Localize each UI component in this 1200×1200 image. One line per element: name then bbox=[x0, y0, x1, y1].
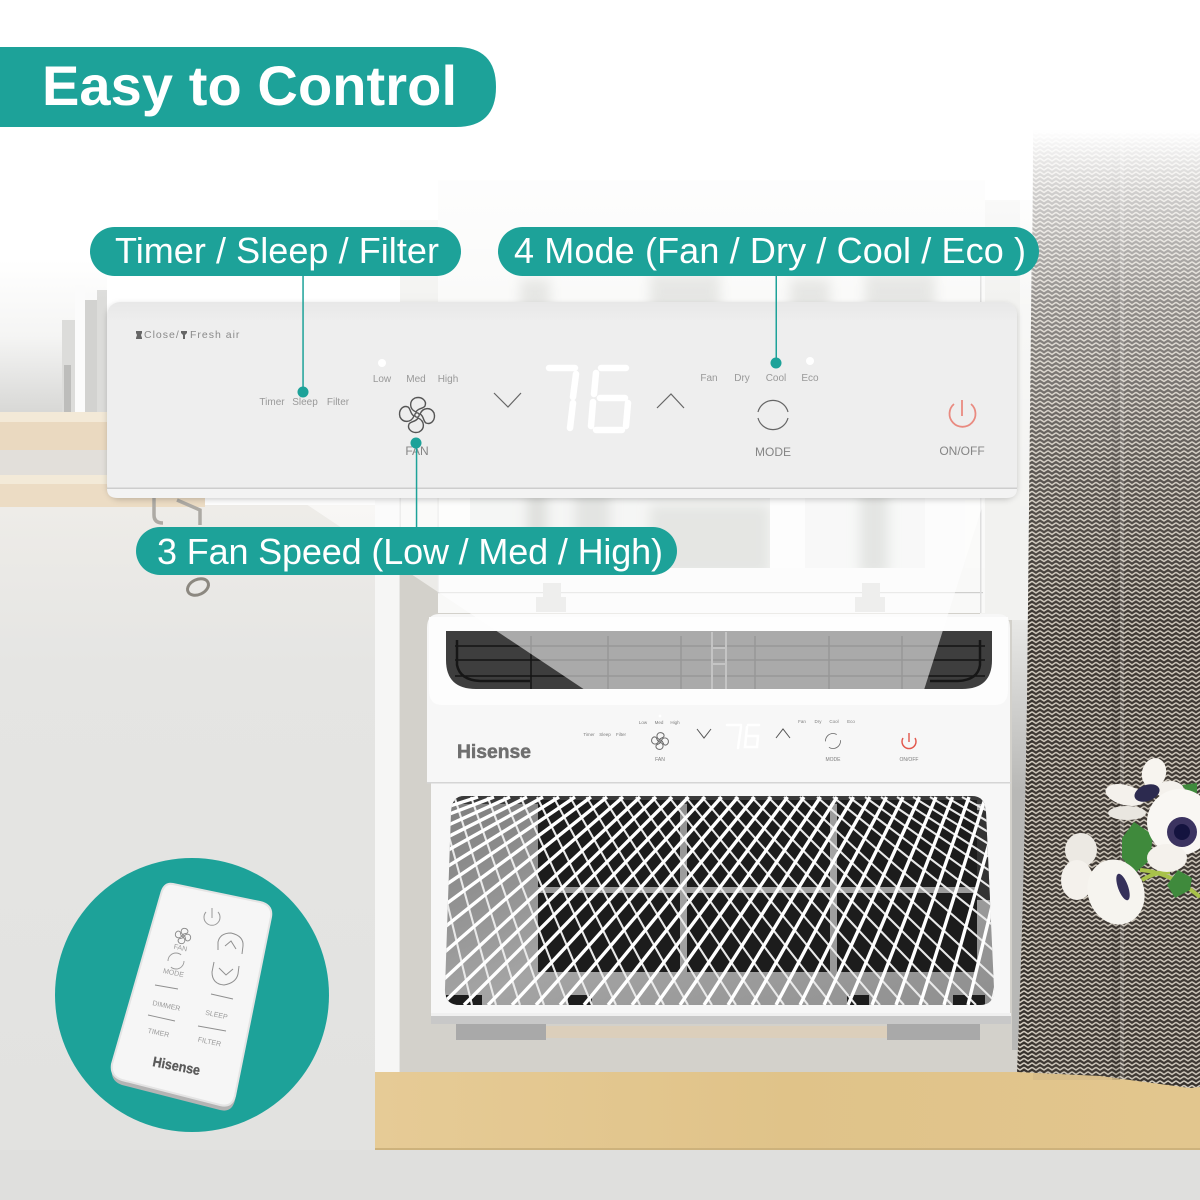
translucent projection from panel to unit bbox=[297, 498, 985, 690]
callout: fan speed: 3 Fan Speed (Low / Med / High) bbox=[157, 531, 663, 572]
front air grille bbox=[444, 796, 994, 1005]
top air vent bbox=[446, 631, 992, 689]
title banner bbox=[0, 47, 496, 127]
fan speed labels: High bbox=[438, 374, 458, 385]
window with blurred garden view bbox=[438, 276, 985, 613]
callout: timer sleep filter: Timer / Sleep / Filter bbox=[115, 230, 439, 271]
fresh air label bbox=[136, 329, 240, 341]
leader line: timer sleep filter bbox=[298, 274, 308, 398]
icon: mode bbox=[758, 400, 788, 430]
bookshelf at left bbox=[0, 285, 205, 507]
mode labels: Eco bbox=[801, 373, 819, 384]
hook below panel bbox=[154, 498, 200, 525]
wooden window sill bbox=[375, 1072, 1200, 1150]
unit mini control panel: Eco bbox=[847, 719, 855, 724]
mode labels: Dry bbox=[734, 373, 750, 384]
icon: fan bbox=[400, 398, 434, 432]
fan speed labels: Med bbox=[406, 374, 426, 385]
flowers bbox=[1061, 755, 1200, 933]
teal circle bbox=[55, 858, 329, 1132]
remote control badge bbox=[55, 858, 329, 1132]
remote: TIMER bbox=[147, 1028, 170, 1039]
mode label: MODE bbox=[755, 445, 791, 459]
callout: four modes: 4 Mode (Fan / Dry / Cool / Eco ) bbox=[514, 230, 1026, 271]
remote: MODE bbox=[162, 968, 185, 979]
on/off label: ON/OFF bbox=[939, 444, 985, 458]
AC body bbox=[427, 614, 1010, 1015]
fresh air label: Fresh air bbox=[190, 329, 240, 341]
icon: temperature up bbox=[657, 394, 684, 408]
remote: FAN bbox=[173, 944, 188, 953]
air conditioner bbox=[400, 614, 1040, 1045]
unit mini control panel: ON/OFF bbox=[900, 757, 918, 763]
mode labels: Cool bbox=[766, 373, 786, 384]
timer sleep filter labels: Timer bbox=[259, 397, 285, 408]
white fade over top of scene bbox=[0, 130, 1033, 300]
unit mini control panel: MODE bbox=[826, 757, 841, 763]
AC feet and tan strip bbox=[456, 1022, 980, 1040]
flower right bbox=[1147, 789, 1200, 872]
remote: FILTER bbox=[197, 1037, 222, 1048]
stems and leaves bbox=[1122, 783, 1200, 898]
unit mini control panel: Filter bbox=[616, 732, 627, 737]
remote: DIMMER bbox=[152, 1000, 181, 1013]
remote: Hisense bbox=[151, 1053, 202, 1078]
flower lower bbox=[1061, 833, 1154, 933]
window latch right bbox=[855, 583, 885, 612]
unit mini control panel: High bbox=[670, 720, 680, 725]
enlarged control panel bbox=[107, 302, 1017, 498]
mode labels bbox=[700, 357, 819, 384]
ring pull bbox=[185, 576, 211, 598]
fan label: FAN bbox=[405, 444, 429, 458]
remote bbox=[112, 884, 271, 1111]
leader line: fan speed bbox=[410, 438, 422, 529]
unit mini control panel: Cool bbox=[829, 719, 839, 724]
fresh air label: Close/ bbox=[144, 329, 180, 341]
unit mini control panel: Low bbox=[639, 720, 648, 725]
icon: temperature down bbox=[494, 393, 521, 407]
unit mini control panel: Sleep bbox=[599, 732, 611, 737]
leader line: modes bbox=[770, 274, 782, 368]
timer sleep filter labels: Filter bbox=[327, 397, 350, 408]
window latch left bbox=[536, 583, 566, 612]
timer sleep filter labels bbox=[259, 397, 350, 408]
curtain bbox=[1017, 130, 1200, 1088]
unit mini control panel: FAN bbox=[655, 757, 665, 763]
icon: power bbox=[950, 400, 976, 427]
unit mini control panel: Dry bbox=[814, 719, 822, 724]
fan speed labels bbox=[373, 359, 458, 385]
unit mini control panel: Med bbox=[655, 720, 664, 725]
unit mini control panel: Timer bbox=[583, 732, 595, 737]
unit mini control panel: Fan bbox=[798, 719, 806, 724]
title banner: Easy to Control bbox=[42, 54, 457, 117]
timer sleep filter labels: Sleep bbox=[292, 397, 318, 408]
mode labels: Fan bbox=[700, 373, 718, 384]
unit mini control panel bbox=[583, 715, 918, 763]
temperature display bbox=[549, 368, 628, 430]
flower top bbox=[1103, 755, 1184, 820]
logo: Hisense on unit: Hisense bbox=[457, 742, 531, 763]
fan speed labels: Low bbox=[373, 374, 392, 385]
remote: SLEEP bbox=[205, 1010, 228, 1021]
